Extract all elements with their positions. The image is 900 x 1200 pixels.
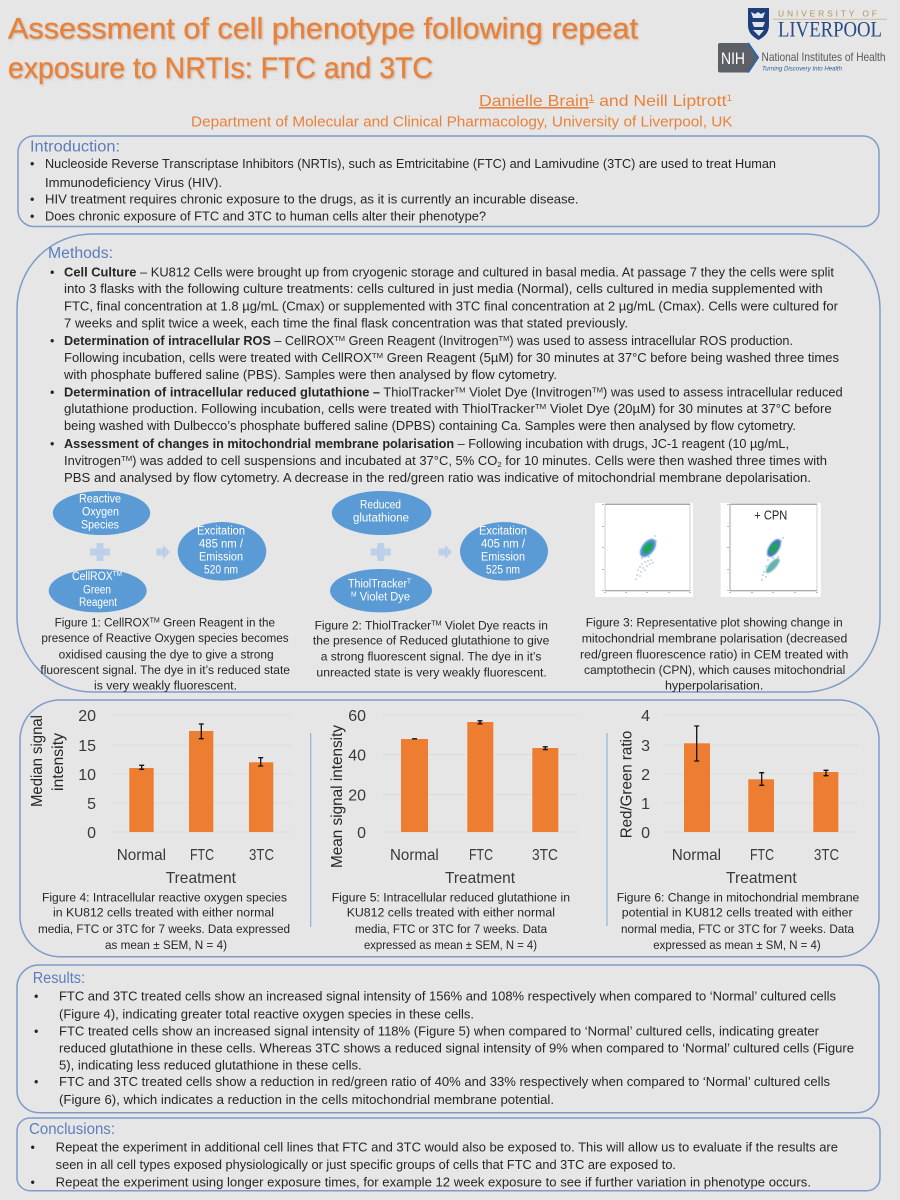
chart: figure 4 median signal intensity: Normal (117, 847, 166, 864)
chart: figure 6 red/green ratio (618, 708, 859, 887)
results bullets: (Figure 6), which indicates a reduction in the cells mitochondrial membrane potential. (59, 1093, 554, 1107)
methods bullets: Determination of intracellular ROS – CellROX (64, 334, 334, 348)
chart: figure 6 red/green ratio: 1 (641, 796, 650, 813)
figure 1 diagram: Oxygen (82, 507, 119, 519)
introduction bullets: Does chronic exposure of FTC and 3TC to human cells alter their phenotype? (45, 210, 486, 224)
methods bullets: being washed with Dulbecco’s phosphate buffered saline (DPBS) containing Ca. Samples were then analysed by flow cytometry. (64, 419, 796, 433)
figure 6 caption: normal media, FTC or 3TC for 7 weeks. Data (621, 922, 854, 936)
figure 2 diagram: glutathione (353, 513, 409, 525)
figure 6 caption: Figure 6: Change in mitochondrial membrane (617, 891, 859, 905)
chart: figure 5 mean signal intensity: 20 (348, 787, 366, 804)
plot: control (595, 503, 693, 597)
results bullets: • (34, 1025, 38, 1039)
authors: Danielle Brain (479, 93, 589, 110)
conclusions bullets: seen in all cell types exposed physiologically or just specific groups of cells that FTC and 3TC are exposed to. (56, 1158, 676, 1172)
panel: charts (20, 700, 879, 957)
methods bullets: ) was used to assess intracellular reduced (603, 386, 843, 400)
figure 4 caption: media, FTC or 3TC for 7 weeks. Data expressed (38, 922, 290, 936)
figure 3 caption: Figure 3: Representative plot showing change in (586, 616, 843, 630)
figure 1 caption: is very weakly fluorescent. (94, 678, 237, 692)
panel: conclusions (17, 1118, 880, 1191)
figure 1 caption (40, 616, 290, 692)
methods bullets: glutathione production. Following incubation, cells were treated with ThiolTracker (64, 402, 513, 416)
panel: introduction (18, 136, 879, 226)
results bullets: (Figure 4), indicating greater total reactive oxygen species in these cells. (59, 1008, 474, 1022)
logo: NIH: NIH (721, 49, 745, 68)
chart: figure 4 median signal intensity: 5 (87, 796, 96, 813)
figure 6 caption: expressed as mean ± SM, N = 4) (653, 938, 821, 952)
figure 1 caption: Figure 1: CellROX (55, 616, 155, 630)
figure 5 caption: KU812 cells treated with either normal (347, 906, 555, 920)
methods bullets: TM (454, 386, 466, 395)
figure 2 diagram: Violet Dye (357, 592, 410, 604)
methods bullets: Cell Culture – KU812 Cells were brought up from cryogenic storage and cultured in basal media. At passage 7 they the cells were split (64, 266, 835, 280)
chart: figure 6 red/green ratio: FTC (750, 847, 774, 864)
figure 1 diagram: Reactive (79, 494, 121, 506)
methods bullets: into 3 flasks with the following culture treatments: cells cultured in just media (Normal), cells cultured in media supplemented with (64, 282, 823, 296)
introduction bullets: • (30, 192, 34, 206)
figure 1 diagram (49, 491, 266, 612)
methods bullets: TM (592, 386, 603, 395)
methods bullets: Green Reagent (5µM) for 30 minutes at 37°C before being washed three times (383, 351, 839, 365)
figure 1 diagram: CellROX (72, 571, 117, 583)
label: + CPN: + CPN (754, 508, 787, 522)
figure 1 diagram: Species (81, 519, 119, 531)
chart: figure 4 median signal intensity: 15 (78, 738, 96, 755)
chart: figure 4 median signal intensity: 3TC (249, 847, 274, 864)
logo: NIH: Turning Discovery Into Health (762, 65, 842, 72)
chart: figure 6 red/green ratio: 2 (641, 767, 650, 784)
methods bullets: FTC, final concentration at 1.8 µg/mL (Cmax) or supplemented with 3TC final concentration at 2 µg/mL (Cmax). Cells were cultured for (64, 300, 838, 314)
figure 2 diagram: M (351, 592, 357, 599)
chart: figure 4 median signal intensity: Median signal (29, 715, 46, 807)
chart: figure 6 red/green ratio: 0 (641, 825, 650, 842)
chart: figure 6 red/green ratio: 3 (641, 738, 650, 755)
methods bullets: ) was used to assess intracellular ROS production. (509, 334, 793, 348)
methods bullets: Green Reagent (Invitrogen (345, 334, 499, 348)
results bullets: • (34, 1075, 38, 1089)
heading: introduction: Introduction: (30, 138, 120, 156)
panel: methods (17, 234, 880, 692)
figure 5 caption: media, FTC or 3TC for 7 weeks. Data (355, 922, 547, 936)
figure 1 caption: Green Reagent in the (160, 616, 275, 630)
figure 2 diagram: Excitation (479, 525, 527, 537)
chart: figure 5 mean signal intensity: Treatment (445, 870, 516, 887)
logo: University of Liverpool: LIVERPOOL (778, 17, 882, 42)
methods bullets: TM (499, 334, 509, 343)
methods bullets: • (50, 437, 54, 451)
figure 2 diagram: Emission (481, 551, 525, 563)
methods bullets: • (50, 266, 54, 280)
chart: figure 5 mean signal intensity: 0 (357, 825, 366, 842)
results bullets: FTC and 3TC treated cells show a reduction in red/green ratio of 40% and 33% respectively when compared to ‘Normal’ cultured cells (59, 1075, 830, 1089)
figure 2 caption: unreacted state is very weakly fluorescent. (316, 666, 547, 680)
introduction bullets: Nucleoside Reverse Transcriptase Inhibitors (NRTIs), such as Emtricitabine (FTC) and Lamivudine (3TC) are used to treat Human (45, 157, 776, 171)
figure 1 diagram: Reagent (79, 597, 118, 609)
methods bullets: Invitrogen (64, 454, 119, 468)
chart: figure 6 red/green ratio: Red/Green ratio (618, 731, 636, 838)
figure 4 caption: Figure 4: Intracellular reactive oxygen species (42, 891, 287, 905)
chart: figure 5 mean signal intensity: 60 (348, 708, 366, 725)
methods bullets: TM (121, 454, 132, 463)
figure 3 caption: mitochondrial membrane polarisation (decreased (582, 632, 847, 646)
figure 1 caption: oxidised causing the dye to give a strong (59, 647, 274, 661)
chart: figure 6 red/green ratio: 4 (641, 708, 650, 725)
panel: results (17, 965, 879, 1113)
figure 1 diagram: 485 nm / (199, 538, 244, 550)
figure 1 diagram: 520 nm (204, 564, 238, 576)
methods bullets: TM (535, 402, 546, 411)
conclusions bullets (30, 1141, 838, 1190)
methods bullets: Following incubation, cells were treated with CellROX (64, 351, 362, 365)
methods bullets: • (50, 386, 54, 400)
methods bullets: ) was added to cell suspensions and incubated at 37°C, 5% CO (132, 454, 498, 468)
logo: NIH (718, 43, 886, 72)
methods bullets: PBS and analysed by flow cytometry. A decrease in the red/green ratio was indicative of mitochondrial membrane depolarisation. (64, 471, 811, 485)
chart: figure 4 median signal intensity (29, 708, 292, 887)
heading: methods: Methods: (48, 245, 113, 262)
introduction bullets: • (30, 210, 34, 224)
methods bullets: Determination of intracellular reduced glutathione – ThiolTracker (64, 386, 453, 400)
methods bullets: 2 (497, 460, 502, 469)
affiliation: Department of Molecular and Clinical Pharmacology, University of Liverpool, UK (191, 114, 732, 130)
figure 1 diagram: Emission (199, 551, 243, 563)
chart: figure 4 median signal intensity: Treatment (166, 870, 237, 887)
methods bullets: for 10 minutes. Cells were then washed three times with (502, 454, 827, 468)
logo: University of Liverpool (748, 8, 887, 42)
figure 2 diagram: 405 nm / (481, 538, 526, 550)
results bullets (34, 990, 854, 1107)
methods bullets: with phosphate buffered saline (PBS). Samples were then analysed by flow cytometry. (63, 368, 557, 382)
authors: and Neill Liptrott (594, 93, 727, 110)
figure 4 caption: in KU812 cells treated with either normal (53, 906, 274, 920)
chart: figure 6 red/green ratio: 3TC (814, 847, 839, 864)
introduction bullets: Immunodeficiency Virus (HIV). (45, 176, 222, 190)
figure 3 caption: hyperpolarisation. (665, 678, 763, 692)
figure 2 diagram: T (407, 578, 412, 585)
figure 5 caption: expressed as mean ± SEM, N = 4) (364, 938, 537, 952)
chart: figure 5 mean signal intensity (329, 708, 578, 887)
introduction bullets: HIV treatment requires chronic exposure to the drugs, as it is currently an incurable disease. (45, 192, 578, 206)
figure 4 caption: as mean ± SEM, N = 4) (105, 938, 227, 952)
figure 4 caption (38, 891, 290, 952)
chart: figure 4 median signal intensity: 0 (87, 825, 96, 842)
methods bullets: Violet Dye (Invitrogen (466, 386, 592, 400)
figure 1 caption: TM (150, 616, 160, 625)
conclusions bullets: • (30, 1141, 35, 1155)
figure 5 caption: Figure 5: Intracellular reduced glutathione in (332, 891, 570, 905)
chart: figure 4 median signal intensity: FTC (190, 847, 214, 864)
conclusions bullets: • (30, 1176, 35, 1190)
methods bullets: TM (372, 351, 383, 360)
chart: figure 4 median signal intensity: 10 (78, 767, 96, 784)
figure 1 diagram: Excitation (197, 525, 245, 537)
chart: figure 5 mean signal intensity: 40 (348, 747, 366, 764)
figure 2 caption: the presence of Reduced glutathione to give (313, 634, 549, 648)
figure 2 diagram: ThiolTracker (348, 578, 411, 590)
authors: 1 (589, 93, 594, 103)
conclusions bullets: Repeat the experiment using longer exposure times, for example 12 week exposure to see if further variation in phenotype occurs. (56, 1176, 811, 1190)
figure 2 caption: Violet Dye reacts in (442, 618, 548, 632)
title: Assessment of cell phenotype following repeat (8, 12, 638, 46)
chart: figure 6 red/green ratio: Treatment (726, 870, 797, 887)
chart: figure 5 mean signal intensity: FTC (469, 847, 493, 864)
figure 2 caption: a strong fluorescent signal. The dye in it’s (321, 650, 541, 664)
methods bullets (50, 266, 843, 485)
figure 5 caption (332, 891, 570, 952)
figure 1 caption: presence of Reactive Oxygen species becomes (41, 631, 289, 645)
results bullets: reduced glutathione in these cells. Whereas 3TC shows a reduced signal intensity of 9% when compared to ‘Normal’ cultured cells (Figure (59, 1042, 854, 1056)
methods bullets: 7 weeks and split twice a week, each time the final flask concentration was that stated previously. (64, 316, 628, 330)
methods bullets: TM (334, 334, 345, 343)
plot: + CPN (721, 503, 821, 597)
introduction bullets (30, 157, 776, 224)
figure 2 caption: Figure 2: ThiolTracker (315, 618, 435, 632)
methods bullets: Violet Dye (20µM) for 30 minutes at 37°C before (546, 402, 832, 416)
figure 3 caption: camptothecin (CPN), which causes mitochondrial (584, 663, 845, 677)
results bullets: FTC treated cells show an increased signal intensity of 118% (Figure 5) when compared to ‘Normal’ cultured cells, indicating greater (59, 1025, 819, 1039)
introduction bullets: • (30, 157, 34, 171)
figure 3 caption (580, 616, 848, 692)
figure 1 diagram: TM (113, 571, 122, 578)
chart: figure 4 median signal intensity: 20 (78, 708, 96, 725)
title (8, 12, 638, 85)
chart: figure 5 mean signal intensity: Normal (390, 847, 439, 864)
title: exposure to NRTIs: FTC and 3TC (8, 52, 433, 85)
figure 3 caption: red/green fluorescence ratio) in CEM treated with (580, 648, 848, 662)
figure 2 diagram (330, 491, 548, 612)
figure 2 diagram: 525 nm (486, 564, 520, 576)
figure 6 caption (617, 891, 859, 952)
results bullets: FTC and 3TC treated cells show an increased signal intensity of 156% and 108% respectively when compared to ‘Normal’ cultured cells (59, 990, 836, 1004)
conclusions bullets: Repeat the experiment in additional cell lines that FTC and 3TC would also be exposed to. This will allow us to evaluate if the results are (56, 1141, 838, 1155)
figure 2 diagram: Reduced (360, 499, 401, 511)
results bullets: • (34, 990, 38, 1004)
heading: conclusions: Conclusions: (29, 1121, 115, 1138)
chart: figure 4 median signal intensity: intensity (50, 733, 67, 791)
chart: figure 5 mean signal intensity: Mean signal intensity (329, 725, 346, 868)
chart: figure 5 mean signal intensity: 3TC (532, 847, 558, 864)
chart: figure 6 red/green ratio: Normal (672, 847, 721, 864)
methods bullets: • (50, 334, 54, 348)
methods bullets: Assessment of changes in mitochondrial membrane polarisation – Following incubation with drugs, JC-1 reagent (10 µg/mL, (64, 437, 789, 451)
figure 6 caption: potential in KU812 cells treated with either (622, 906, 853, 920)
figure 2 caption: TM (431, 618, 442, 627)
logo: University of Liverpool: UNIVERSITY OF (778, 9, 877, 19)
figure 1 caption: fluorescent signal. The dye in it’s reduced state (40, 663, 290, 677)
authors: 1 (726, 93, 732, 103)
figure 2 caption (313, 618, 549, 680)
results bullets: 5), indicating less reduced glutathione in these cells. (59, 1059, 362, 1073)
figure 3 flow cytometry plots (595, 503, 821, 597)
figure 1 diagram: Green (83, 584, 111, 596)
heading: results: Results: (33, 970, 85, 987)
